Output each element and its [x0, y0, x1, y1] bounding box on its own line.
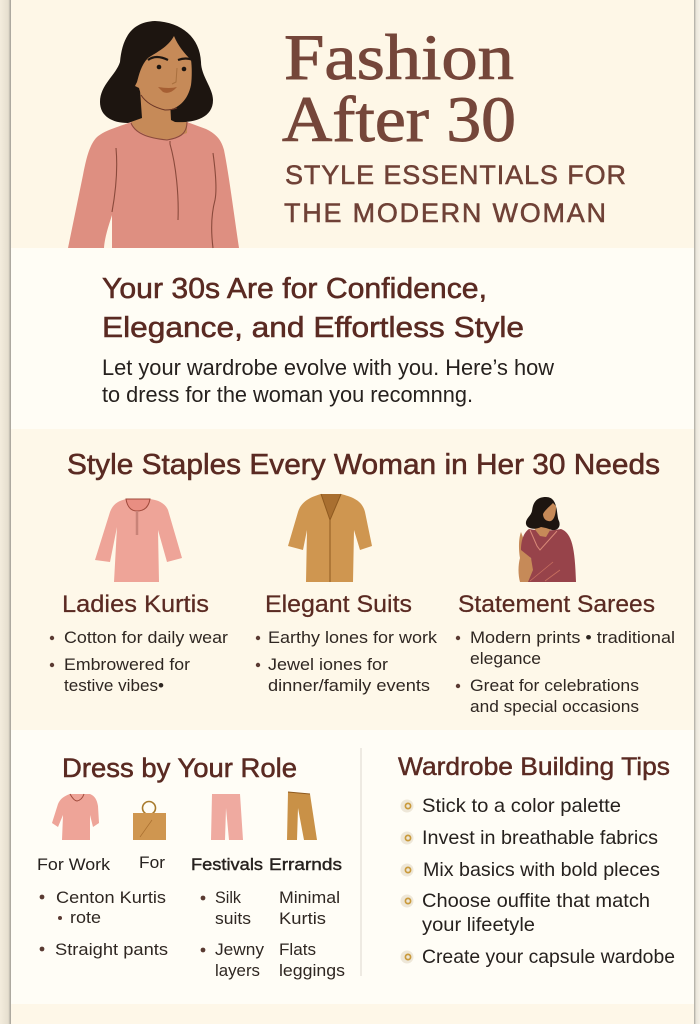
bullets: ladies kurtis: Cotton for daily wear [64, 628, 228, 647]
bullets: elegant suits [256, 628, 438, 695]
intro text [102, 355, 554, 407]
bullets: ladies kurtis: testive vibes• [64, 676, 164, 695]
role heading: Dress by Your Role [62, 753, 297, 783]
list: for work: Centon Kurtis [56, 888, 166, 907]
role labels [37, 853, 342, 874]
illustration: woman in pink kurti [68, 21, 239, 248]
label: ladies kurtis: Ladies Kurtis [62, 591, 209, 618]
column: statement sarees [456, 497, 675, 716]
icon: kurti [95, 499, 182, 582]
tip list: your lifeetyle [422, 914, 535, 936]
tip list: Invest in breathable fabrics [422, 827, 658, 849]
bullets: statement sarees: and special occasions [470, 697, 639, 716]
tip list: Mix basics with bold pleces [423, 859, 660, 881]
bullets: ladies kurtis: Embrowered for [64, 655, 190, 674]
tip list: Stick to a color palette [422, 795, 621, 817]
list: for errands [279, 888, 345, 980]
list: for work: rote [70, 908, 101, 927]
panel: header [68, 21, 626, 248]
panel: introduction [102, 273, 554, 407]
intro heading [102, 273, 524, 344]
icon: woman in saree [518, 497, 576, 582]
icon: suit jacket [288, 494, 372, 582]
list: for festivals: suits [215, 909, 251, 928]
title: After 30 [282, 84, 516, 156]
list: for errands: Kurtis [279, 909, 326, 928]
intro heading: Your 30s Are for Confidence, [102, 273, 487, 305]
list: for work: Straight pants [55, 940, 168, 959]
role labels: Errarnds [269, 855, 342, 874]
list: for errands: Flats [279, 940, 316, 959]
title: Fashion [284, 22, 514, 94]
role labels: For [139, 853, 165, 872]
list: for work [40, 888, 168, 959]
bullets: statement sarees: elegance [470, 649, 541, 668]
subtitle: THE MODERN WOMAN [284, 198, 606, 228]
list: for festivals: Silk [215, 888, 241, 907]
tip list [400, 795, 675, 968]
subtitle: STYLE ESSENTIALS FOR [285, 160, 626, 190]
tip list: Create your capsule wardobe [422, 946, 675, 968]
role labels: Festivals [191, 855, 263, 874]
role labels: For Work [37, 855, 111, 874]
list: for festivals: Jewny [215, 940, 265, 959]
bullets: elegant suits: dinner/family events [268, 676, 430, 695]
panel: dress by your role [37, 753, 345, 980]
list: for festivals: layers [215, 961, 260, 980]
icon: pink pants [211, 794, 243, 840]
bullets: elegant suits: Jewel iones for [268, 655, 388, 674]
list: for festivals [201, 888, 265, 980]
panel: wardrobe building tips [398, 753, 675, 968]
intro heading: Elegance, and Effortless Style [102, 312, 524, 344]
column: elegant suits [256, 494, 438, 695]
icon: work kurti [52, 794, 99, 840]
bullets: ladies kurtis [50, 628, 228, 695]
label: elegant suits: Elegant Suits [265, 591, 412, 618]
icon: handbag [133, 802, 166, 840]
label: statement sarees: Statement Sarees [458, 591, 655, 618]
column: ladies kurtis [50, 499, 228, 695]
tip list: Choose ouffite that match [422, 890, 650, 912]
intro text: Let your wardrobe evolve with you. Here’s how [102, 355, 554, 380]
icon: tan trousers [287, 792, 317, 840]
intro text: to dress for the woman you recomnng. [102, 382, 473, 407]
list: for errands: Minimal [279, 888, 340, 907]
bullets: statement sarees: Great for celebrations [470, 676, 639, 695]
bullets: elegant suits: Earthy lones for work [268, 628, 438, 647]
bullets: statement sarees: Modern prints • traditional [470, 628, 675, 647]
panel: style staples [50, 449, 675, 716]
tips heading: Wardrobe Building Tips [398, 753, 670, 781]
bullets: statement sarees [456, 628, 675, 716]
title [282, 22, 516, 156]
list: for errands: leggings [279, 961, 345, 980]
staples heading: Style Staples Every Woman in Her 30 Needs [67, 449, 660, 481]
subtitle [284, 160, 626, 228]
